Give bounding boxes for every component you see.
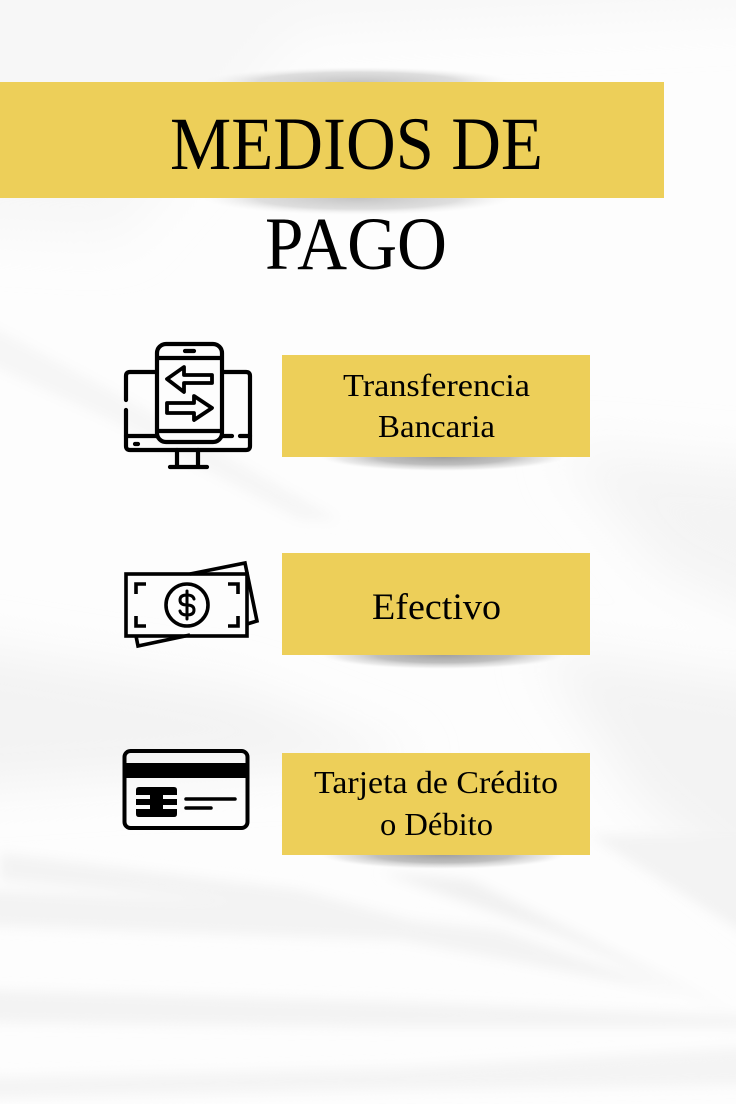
label: o debito: o Débito [380, 806, 493, 842]
label shadow [321, 443, 565, 471]
label: efectivo: Efectivo [372, 587, 501, 628]
label: tarjeta de credito: Tarjeta de Crédito [314, 764, 558, 800]
row: efectivo [126, 553, 590, 669]
label: bancaria: Bancaria [378, 408, 495, 444]
icon: credit card [124, 751, 248, 828]
label shadow [321, 641, 565, 669]
icon: phone and monitor transfer [126, 344, 250, 467]
label box [282, 355, 590, 457]
label shadow [321, 841, 565, 869]
title: line 2: PAGO [265, 203, 447, 286]
row: transferencia bancaria [126, 344, 590, 471]
title band [0, 82, 664, 198]
label box [282, 753, 590, 855]
label: transferencia: Transferencia [343, 367, 530, 403]
title: line 1: MEDIOS DE [170, 103, 543, 186]
label box [282, 553, 590, 655]
icon: banknotes [126, 563, 257, 646]
row: tarjeta [124, 751, 590, 869]
title band shadow [203, 67, 513, 215]
